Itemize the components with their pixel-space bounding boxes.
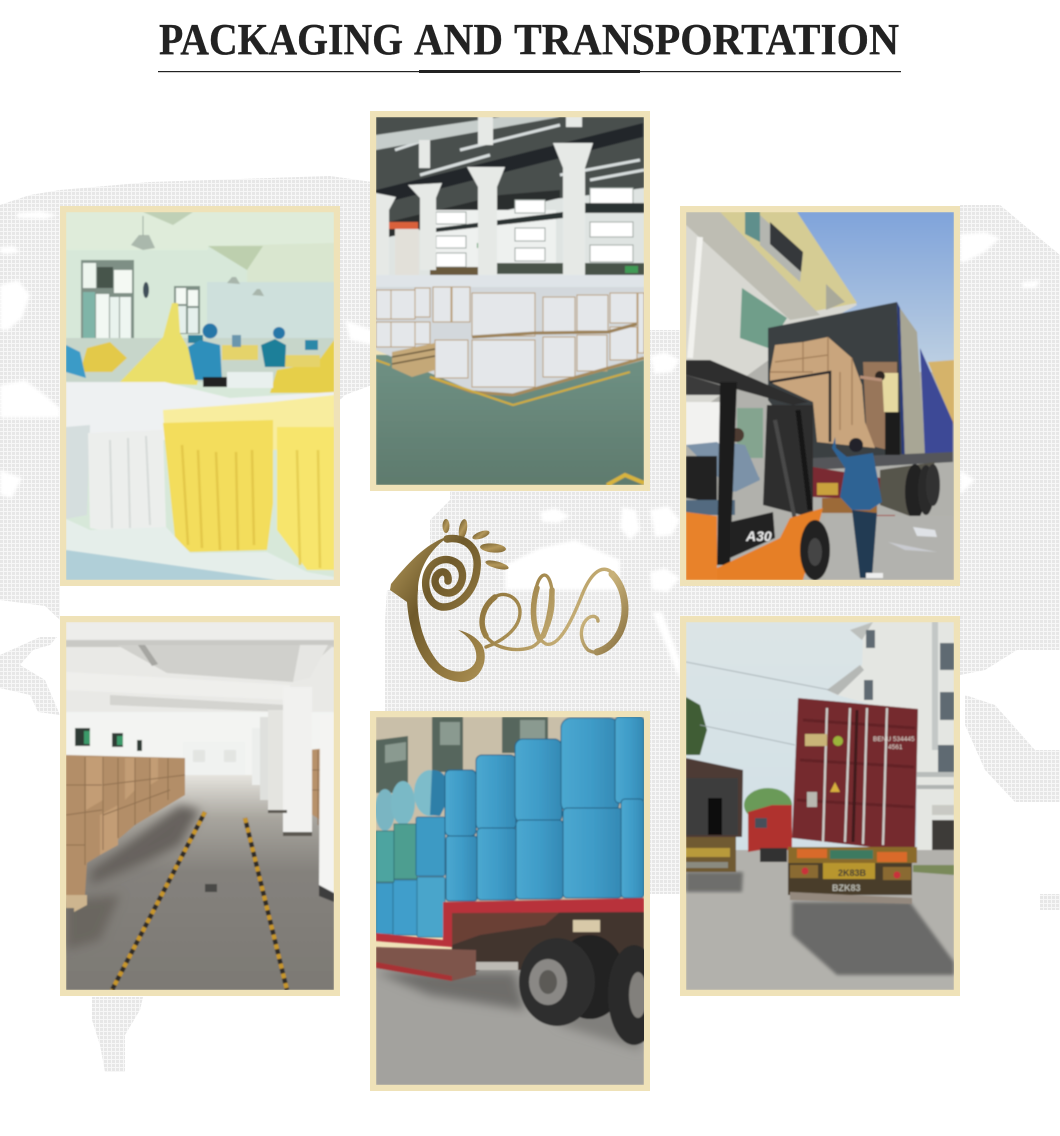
photo: red shipping container	[680, 616, 960, 996]
white packed bags	[66, 425, 90, 519]
yellow heaps	[80, 342, 127, 372]
shipping container: 4561	[888, 744, 903, 751]
left truck	[686, 758, 743, 872]
container	[768, 302, 953, 525]
photo: bright warehouse aisle with cartons	[60, 616, 340, 996]
worker in denim	[832, 437, 883, 578]
photo: workers packing yellow garments	[60, 206, 340, 586]
ceiling	[376, 117, 644, 232]
truck chassis	[376, 898, 660, 1045]
carton stacks	[66, 748, 328, 912]
logo	[390, 518, 626, 682]
worker on truck	[860, 371, 900, 455]
columns	[252, 687, 334, 902]
workers	[66, 324, 318, 388]
shipping container	[792, 698, 918, 852]
title	[159, 15, 899, 64]
floor line markings	[376, 360, 630, 405]
title: PACKAGING	[159, 15, 403, 64]
forklift	[686, 360, 830, 580]
cartons	[376, 275, 644, 395]
title: TRANSPORTATION	[514, 15, 899, 64]
windows and wall	[436, 210, 556, 270]
title underline	[158, 70, 901, 73]
floor hazard stripes	[112, 812, 205, 990]
window	[81, 260, 134, 341]
truck rear	[788, 847, 917, 904]
shipping container: BENU 534445	[873, 736, 915, 743]
ground	[376, 965, 644, 1085]
forklift: A30	[745, 528, 772, 544]
wall screens	[75, 728, 142, 751]
photo: blue rolls on red truck	[370, 711, 660, 1091]
photo: forklift loading a truck	[680, 206, 960, 586]
floor	[376, 355, 644, 485]
white packed plastic	[66, 382, 334, 440]
columns	[376, 117, 593, 278]
title: AND	[414, 15, 503, 64]
truck rear: BZK83	[832, 883, 861, 893]
yellow packed bags	[163, 420, 273, 552]
red truck cab	[748, 805, 792, 862]
floor	[66, 775, 334, 990]
world map background	[0, 176, 1060, 1072]
photo: warehouse with palletised cartons	[370, 111, 650, 491]
truck rear: 2K83B	[838, 868, 867, 878]
ground	[686, 850, 954, 990]
blue rolls	[375, 717, 644, 937]
